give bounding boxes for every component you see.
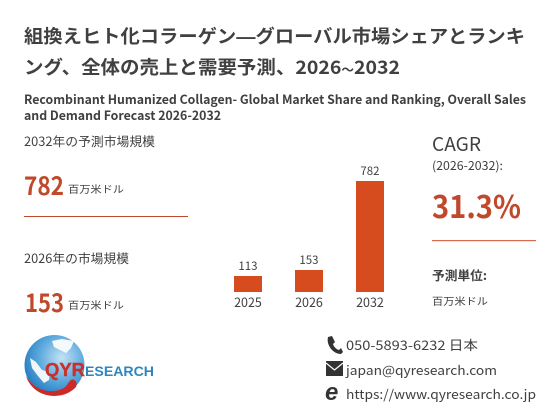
logo wordmark [45,360,154,380]
panel: forecast unit: 予測単位: [432,265,487,284]
bar: 2032: 782 [360,163,380,179]
contact: phone: 050-5893-6232 日本 [346,335,478,354]
contact: website: https://www.qyresearch.co.jp [346,384,536,403]
subtitle: English [24,89,526,124]
panel: 2026 market size: 153 [25,284,64,320]
logo wordmark: ESEARCH [85,363,154,379]
panel: 2026 market size: 百万米ドル [68,297,124,312]
icon: browser e: e [325,379,338,406]
logo wordmark: QYR [45,360,85,380]
bar: 2032: 2032 [356,292,384,311]
subtitle: English: Recombinant Humanized Collagen- Global Market Share and Ranking, Overall Sales [24,89,526,108]
bar chart [234,163,384,311]
panel: 2032 forecast market size [24,131,188,217]
contact: website [325,379,536,406]
panel: 2026 market size: 2026年の市場規模 [24,248,129,267]
icon: globe [24,335,84,396]
bar: 2026: 2026 [295,292,323,311]
bar: 2025: 113 [238,258,258,274]
panel: CAGR [432,130,536,241]
panel: 2032 forecast market size: 百万米ドル [68,181,124,196]
panel: CAGR: 31.3% [432,182,521,227]
panel: CAGR: (2026-2032): [432,157,503,174]
subtitle: English: and Demand Forecast 2026-2032 [24,105,221,124]
icon: envelope [326,361,343,376]
bar: 2025 [234,258,262,311]
title: Japanese: ング、全体の売上と需要予測、2026 ～2032 [24,54,400,80]
contact: email: japan@qyresearch.com [345,360,497,379]
panel: forecast unit: 百万米ドル [432,293,488,308]
icon: phone [328,336,343,354]
bar: 2026 [295,252,323,311]
panel: 2026 market size [24,248,129,320]
bar: 2026: 153 [299,252,319,268]
panel: forecast unit [432,265,488,308]
panel: 2032 forecast market size: 2032年の予測市場規模 [24,131,155,150]
title: Japanese: 組換えヒト化コラーゲン —グローバル市場シェアとランキ [24,23,525,49]
panel: 2032 forecast market size: 782 [24,167,64,203]
bar: 2032 [356,163,384,311]
panel: CAGR: CAGR [432,130,481,157]
title: Japanese [24,23,525,80]
logo: QYResearch [24,335,154,396]
bar: 2025: 2025 [234,292,262,311]
